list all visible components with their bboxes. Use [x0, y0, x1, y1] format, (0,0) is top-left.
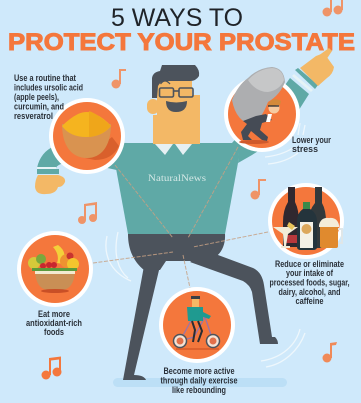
eyebrow: [160, 81, 170, 84]
label: exercise: like rebounding: [172, 385, 226, 395]
trousers: [128, 234, 225, 270]
neck and face: [153, 76, 200, 144]
label: fruit: foods: [44, 327, 64, 337]
circle: cyclist: [159, 287, 235, 363]
label: curcumin: curcumin, and: [14, 102, 64, 112]
circle: curcumin bowl: [49, 98, 125, 174]
sweater: [115, 143, 240, 234]
brand label: NaturalNews: [148, 174, 206, 184]
label: exercise: Become more active: [164, 366, 234, 376]
label: alcohol: Reduce or eliminate: [275, 259, 344, 269]
man: [35, 53, 334, 380]
pointing finger over title: [318, 48, 332, 60]
title: [8, 4, 355, 56]
label: fruit: [26, 309, 82, 337]
label: curcumin: [14, 73, 83, 121]
circle: stress and rock: [224, 67, 300, 152]
label: stress: stress: [292, 144, 318, 154]
collar: [155, 144, 192, 155]
label: stress: [292, 135, 331, 154]
label: curcumin: (apple peels),: [14, 92, 59, 102]
label: stress: Lower your: [292, 135, 331, 145]
label: curcumin: includes ursolic acid: [14, 82, 83, 92]
motion lines: [106, 123, 305, 367]
label: exercise: [160, 366, 238, 395]
circle: alcohol: [268, 183, 344, 259]
label: fruit: Eat more: [38, 309, 70, 319]
music notes: [42, 0, 343, 380]
label: alcohol: caffeine: [296, 296, 324, 306]
left leg: [123, 266, 160, 380]
glasses: [160, 88, 193, 97]
right hand: [300, 53, 334, 86]
title: PROTECT YOUR PROSTATE: [8, 29, 355, 56]
ground shadow: [113, 378, 287, 387]
right arm: [232, 88, 297, 143]
label: curcumin: Use a routine that: [14, 73, 76, 83]
right leg: [190, 250, 278, 344]
label: alcohol: [270, 259, 350, 306]
label: exercise: through daily exercise: [160, 376, 238, 386]
left hand: [35, 175, 65, 194]
label: alcohol: your intake of: [286, 268, 334, 278]
label: alcohol: dairy, alcohol, and: [278, 287, 340, 297]
label: curcumin: resveratrol: [14, 111, 53, 121]
title: 5 WAYS TO: [111, 4, 243, 32]
beard: [166, 101, 187, 112]
hair: [152, 65, 199, 98]
label: fruit: antioxidant-rich: [26, 318, 82, 328]
left arm: [37, 141, 128, 172]
dashed connectors: [93, 147, 268, 288]
circle: fruit basket: [17, 231, 93, 307]
ear: [147, 99, 159, 114]
